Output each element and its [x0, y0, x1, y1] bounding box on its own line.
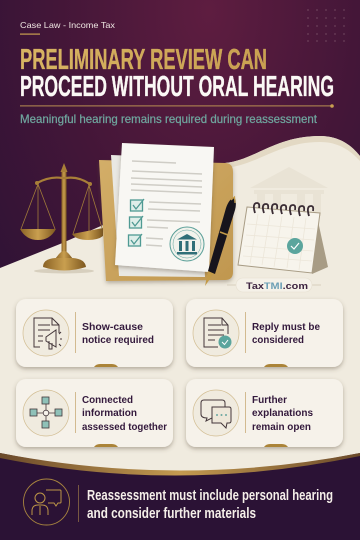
footer conclusion: [24, 479, 333, 525]
subtitle: Meaningful hearing remains required during reassessment: [20, 112, 318, 126]
card: connected information: Connected: [82, 395, 133, 406]
brand pill: TaxTMI.com: [246, 281, 308, 292]
calendar rings: [254, 203, 313, 216]
card: connected information: information: [82, 408, 137, 419]
dotted pattern: [307, 9, 345, 42]
icon: document with check: [204, 318, 228, 347]
folder: [99, 160, 233, 281]
card: reply considered: [186, 299, 343, 367]
gold bottom curve: [0, 453, 360, 476]
card: reply considered: Reply must be: [252, 322, 320, 333]
seal with bank icon: [170, 227, 204, 261]
card: further explanations: explanations: [252, 408, 313, 419]
title: [20, 44, 334, 103]
footer conclusion: and consider further materials: [87, 506, 256, 522]
icon: person with speech bubble: [32, 490, 61, 515]
brand pill: [227, 278, 321, 292]
checkboxes: [128, 199, 144, 246]
icon: scales of justice: [20, 163, 103, 274]
icon: notice with megaphone: [34, 318, 62, 349]
calendar check: [287, 238, 303, 254]
icon: speech bubbles: [201, 400, 231, 428]
card: connected information: assessed together: [82, 422, 167, 433]
icon: connected nodes: [30, 397, 62, 428]
cream top edge highlight: [225, 136, 360, 168]
card: further explanations: Further: [252, 395, 287, 406]
card: further explanations: [186, 379, 343, 447]
calendar grid: [243, 214, 315, 270]
faint building watermark: [250, 167, 328, 216]
icon: fountain pen: [205, 197, 236, 286]
icon: desk calendar: [238, 203, 328, 274]
card: show-cause notice: notice required: [82, 335, 154, 346]
document text lines: [131, 161, 202, 246]
back paper: [111, 155, 205, 277]
card: further explanations: remain open: [252, 422, 311, 433]
cream hero and card background: [0, 136, 360, 472]
title rule: [20, 104, 334, 108]
card: reply considered: considered: [252, 335, 304, 346]
card: show-cause notice: Show-cause: [82, 322, 143, 333]
card: show-cause notice: [16, 299, 173, 367]
category label: [20, 20, 116, 35]
front document: [115, 143, 214, 272]
category label: Case Law - Income Tax: [20, 20, 116, 30]
card: connected information: [16, 379, 173, 447]
